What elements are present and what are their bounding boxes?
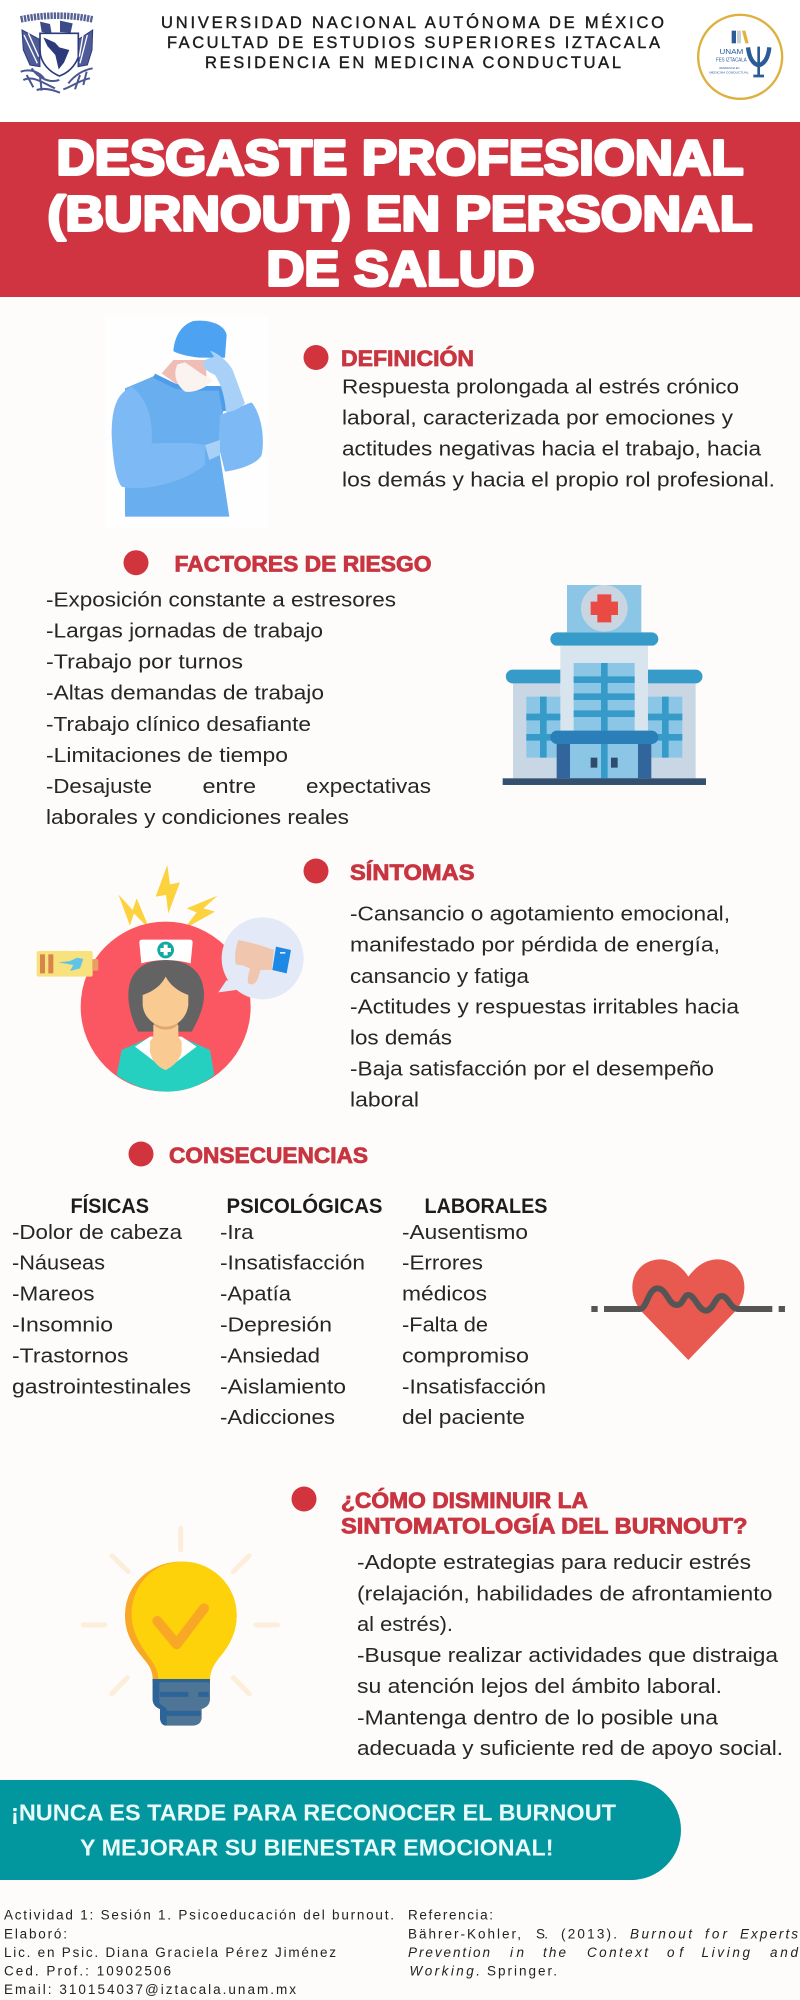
text: risk factors list: -Trabajo clínico desafiante bbox=[46, 713, 311, 736]
text: risk factors list bbox=[46, 588, 431, 829]
title banner: (BURNOUT) EN PERSONAL bbox=[48, 188, 752, 242]
text: symptoms list: -Baja satisfacción por el desempeño bbox=[350, 1057, 714, 1080]
footer: reference: for bbox=[705, 1927, 728, 1942]
panel: síntomas bbox=[37, 858, 740, 1111]
text: recommendations: -Adopte estrategias para reducir estrés bbox=[357, 1551, 751, 1574]
footer: reference: Referencia: bbox=[408, 1908, 493, 1923]
column: laborales: -Falta de bbox=[402, 1314, 488, 1336]
panel: cómo disminuir bbox=[83, 1486, 783, 1760]
heading: definición: DEFINICIÓN bbox=[341, 346, 474, 371]
footer: credits: Ced. Prof.: 10902506 bbox=[4, 1964, 171, 1979]
text: risk factors list: -Altas demandas de trabajo bbox=[46, 682, 324, 705]
icon: residency seal bbox=[698, 15, 782, 99]
heading: cómo disminuir: ¿CÓMO DISMINUIR LA bbox=[341, 1488, 588, 1513]
footer: reference: Experts bbox=[740, 1927, 798, 1942]
text: recommendations: (relajación, habilidades de afrontamiento bbox=[357, 1582, 772, 1605]
text: symptoms list: laboral bbox=[350, 1088, 419, 1111]
text: recommendations: su atención lejos del ámbito laboral. bbox=[357, 1675, 722, 1698]
text: risk factors list: -Exposición constante a estresores bbox=[46, 588, 396, 612]
column: laborales: compromiso bbox=[402, 1344, 529, 1367]
text: symptoms list: -Actitudes y respuestas irritables hacia bbox=[350, 995, 740, 1018]
column: psicológicas: -Ira bbox=[220, 1221, 254, 1244]
heading: síntomas: SÍNTOMAS bbox=[350, 860, 474, 885]
text: symptoms list: cansancio y fatiga bbox=[350, 965, 530, 988]
text: definition: Respuesta prolongada al estrés crónico bbox=[342, 376, 739, 399]
text: recommendations bbox=[357, 1551, 783, 1760]
column: laborales: LABORALES bbox=[424, 1194, 548, 1218]
column: físicas: -Náuseas bbox=[12, 1252, 105, 1275]
icon: exhausted doctor bbox=[105, 315, 268, 528]
column: psicológicas: -Insatisfacción bbox=[220, 1252, 365, 1275]
text: risk factors list: -Largas jornadas de trabajo bbox=[46, 620, 323, 643]
column: laborales: del paciente bbox=[402, 1406, 525, 1429]
heading: cómo disminuir: SINTOMATOLOGÍA DEL BURNOUT? bbox=[341, 1514, 748, 1539]
icon: stressed nurse bbox=[37, 865, 304, 1092]
column: psicológicas: -Depresión bbox=[220, 1314, 332, 1336]
text: symptoms list: manifestado por pérdida de energía, bbox=[350, 934, 720, 957]
column: físicas bbox=[12, 1193, 191, 1398]
text: definition: los demás y hacia el propio rol profesional. bbox=[342, 468, 775, 491]
text: institution names bbox=[161, 13, 664, 72]
footer: reference: Bährer-Kohler, bbox=[408, 1927, 521, 1942]
footer: reference: (2013). bbox=[561, 1927, 617, 1942]
column: físicas: gastrointestinales bbox=[12, 1375, 191, 1398]
footer: reference: the bbox=[543, 1945, 566, 1960]
text: recommendations: -Busque realizar actividades que distraiga bbox=[357, 1644, 779, 1667]
footer: credits: Lic. en Psic. Diana Graciela Pérez Jiménez bbox=[4, 1945, 336, 1960]
column: laborales: -Insatisfacción bbox=[402, 1375, 546, 1398]
heading: cómo disminuir bbox=[292, 1486, 748, 1539]
footer: reference: and bbox=[770, 1945, 798, 1960]
title banner: DE SALUD bbox=[266, 242, 534, 296]
heading: consecuencias: CONSECUENCIAS bbox=[169, 1143, 368, 1168]
heading: factores de riesgo: FACTORES DE RIESGO bbox=[174, 552, 432, 576]
text: recommendations: -Mantenga dentro de lo posible una bbox=[357, 1706, 719, 1729]
text: risk factors list: laborales y condiciones reales bbox=[46, 806, 349, 829]
column: laborales: médicos bbox=[402, 1283, 487, 1306]
title banner bbox=[0, 122, 800, 297]
column: físicas: -Dolor de cabeza bbox=[12, 1221, 183, 1244]
header: institutions bbox=[21, 13, 782, 99]
text: definition: actitudes negativas hacia el trabajo, hacia bbox=[342, 438, 762, 461]
footer: reference: Context bbox=[587, 1945, 649, 1960]
footer: reference: Springer. bbox=[487, 1964, 557, 1979]
column: psicológicas: -Ansiedad bbox=[220, 1344, 320, 1367]
text: risk factors list: entre bbox=[202, 775, 256, 798]
icon: UNAM crest bbox=[21, 16, 93, 93]
heading: síntomas bbox=[304, 858, 474, 885]
callout banner: Y MEJORAR SU BIENESTAR EMOCIONAL! bbox=[80, 1834, 554, 1860]
text: risk factors list: -Desajuste bbox=[46, 775, 152, 798]
callout banner bbox=[0, 1780, 681, 1880]
text: definition bbox=[342, 376, 775, 491]
panel: factores de riesgo bbox=[46, 550, 706, 829]
icon: residency seal: UNAM bbox=[719, 47, 743, 56]
column: físicas: -Insomnio bbox=[12, 1314, 113, 1336]
column: psicológicas: -Aislamiento bbox=[220, 1375, 346, 1398]
footer: credits: Elaboró: bbox=[4, 1927, 67, 1942]
footer: reference: Living bbox=[702, 1945, 750, 1960]
icon: residency seal: MEDICINA CONDUCTUAL bbox=[709, 71, 749, 75]
text: symptoms list: los demás bbox=[350, 1026, 452, 1049]
footer: reference: in bbox=[510, 1945, 524, 1960]
callout banner: ¡NUNCA ES TARDE PARA RECONOCER EL BURNOUT bbox=[11, 1800, 617, 1826]
column: laborales bbox=[402, 1194, 548, 1429]
text: risk factors list: expectativas bbox=[306, 775, 431, 798]
column: psicológicas: -Adicciones bbox=[220, 1406, 335, 1429]
footer: credits: Email: 310154037@iztacala.unam.mx bbox=[4, 1982, 296, 1997]
column: psicológicas bbox=[220, 1193, 382, 1429]
text: institution names: UNIVERSIDAD NACIONAL AUTÓNOMA DE MÉXICO bbox=[161, 13, 664, 32]
footer: reference: of bbox=[667, 1945, 684, 1960]
panel: definición bbox=[105, 315, 775, 528]
text: risk factors list: -Trabajo por turnos bbox=[46, 651, 243, 674]
text: institution names: RESIDENCIA EN MEDICINA CONDUCTUAL bbox=[205, 54, 621, 72]
footer: reference: Burnout bbox=[630, 1927, 693, 1942]
footer: reference: Working. bbox=[410, 1964, 480, 1979]
title banner: DESGASTE PROFESIONAL bbox=[56, 132, 744, 186]
icon: hospital bbox=[503, 585, 706, 785]
column: psicológicas: -Apatía bbox=[220, 1283, 292, 1306]
icon: heart with pulse bbox=[591, 1259, 785, 1360]
footer: reference: S. bbox=[536, 1927, 548, 1942]
column: físicas: -Trastornos bbox=[12, 1344, 128, 1367]
icon: lightbulb with check bbox=[83, 1528, 278, 1726]
text: symptoms list bbox=[350, 902, 740, 1111]
text: recommendations: adecuada y suficiente red de apoyo social. bbox=[357, 1737, 783, 1760]
panel: consecuencias bbox=[12, 1142, 785, 1429]
column: psicológicas: PSICOLÓGICAS bbox=[226, 1193, 382, 1218]
footer: credits bbox=[4, 1908, 394, 1997]
column: laborales: -Ausentismo bbox=[402, 1221, 528, 1244]
footer: reference bbox=[408, 1908, 798, 1979]
text: risk factors list: -Limitaciones de tiempo bbox=[46, 744, 288, 767]
column: físicas: -Mareos bbox=[12, 1283, 94, 1306]
text: institution names: FACULTAD DE ESTUDIOS SUPERIORES IZTACALA bbox=[167, 34, 660, 52]
column: físicas: FÍSICAS bbox=[70, 1193, 149, 1218]
text: symptoms list: -Cansancio o agotamiento emocional, bbox=[350, 902, 730, 925]
icon: residency seal: FES IZTACALA bbox=[716, 58, 747, 64]
text: recommendations: al estrés). bbox=[357, 1613, 453, 1636]
icon: residency seal: RESIDENCIA EN bbox=[719, 66, 739, 70]
footer: credits: Actividad 1: Sesión 1. Psicoeducación del burnout. bbox=[4, 1908, 394, 1923]
text: definition: laboral, caracterizada por emociones y bbox=[342, 407, 734, 430]
column: laborales: -Errores bbox=[402, 1252, 483, 1275]
footer: reference: Prevention bbox=[408, 1945, 490, 1960]
